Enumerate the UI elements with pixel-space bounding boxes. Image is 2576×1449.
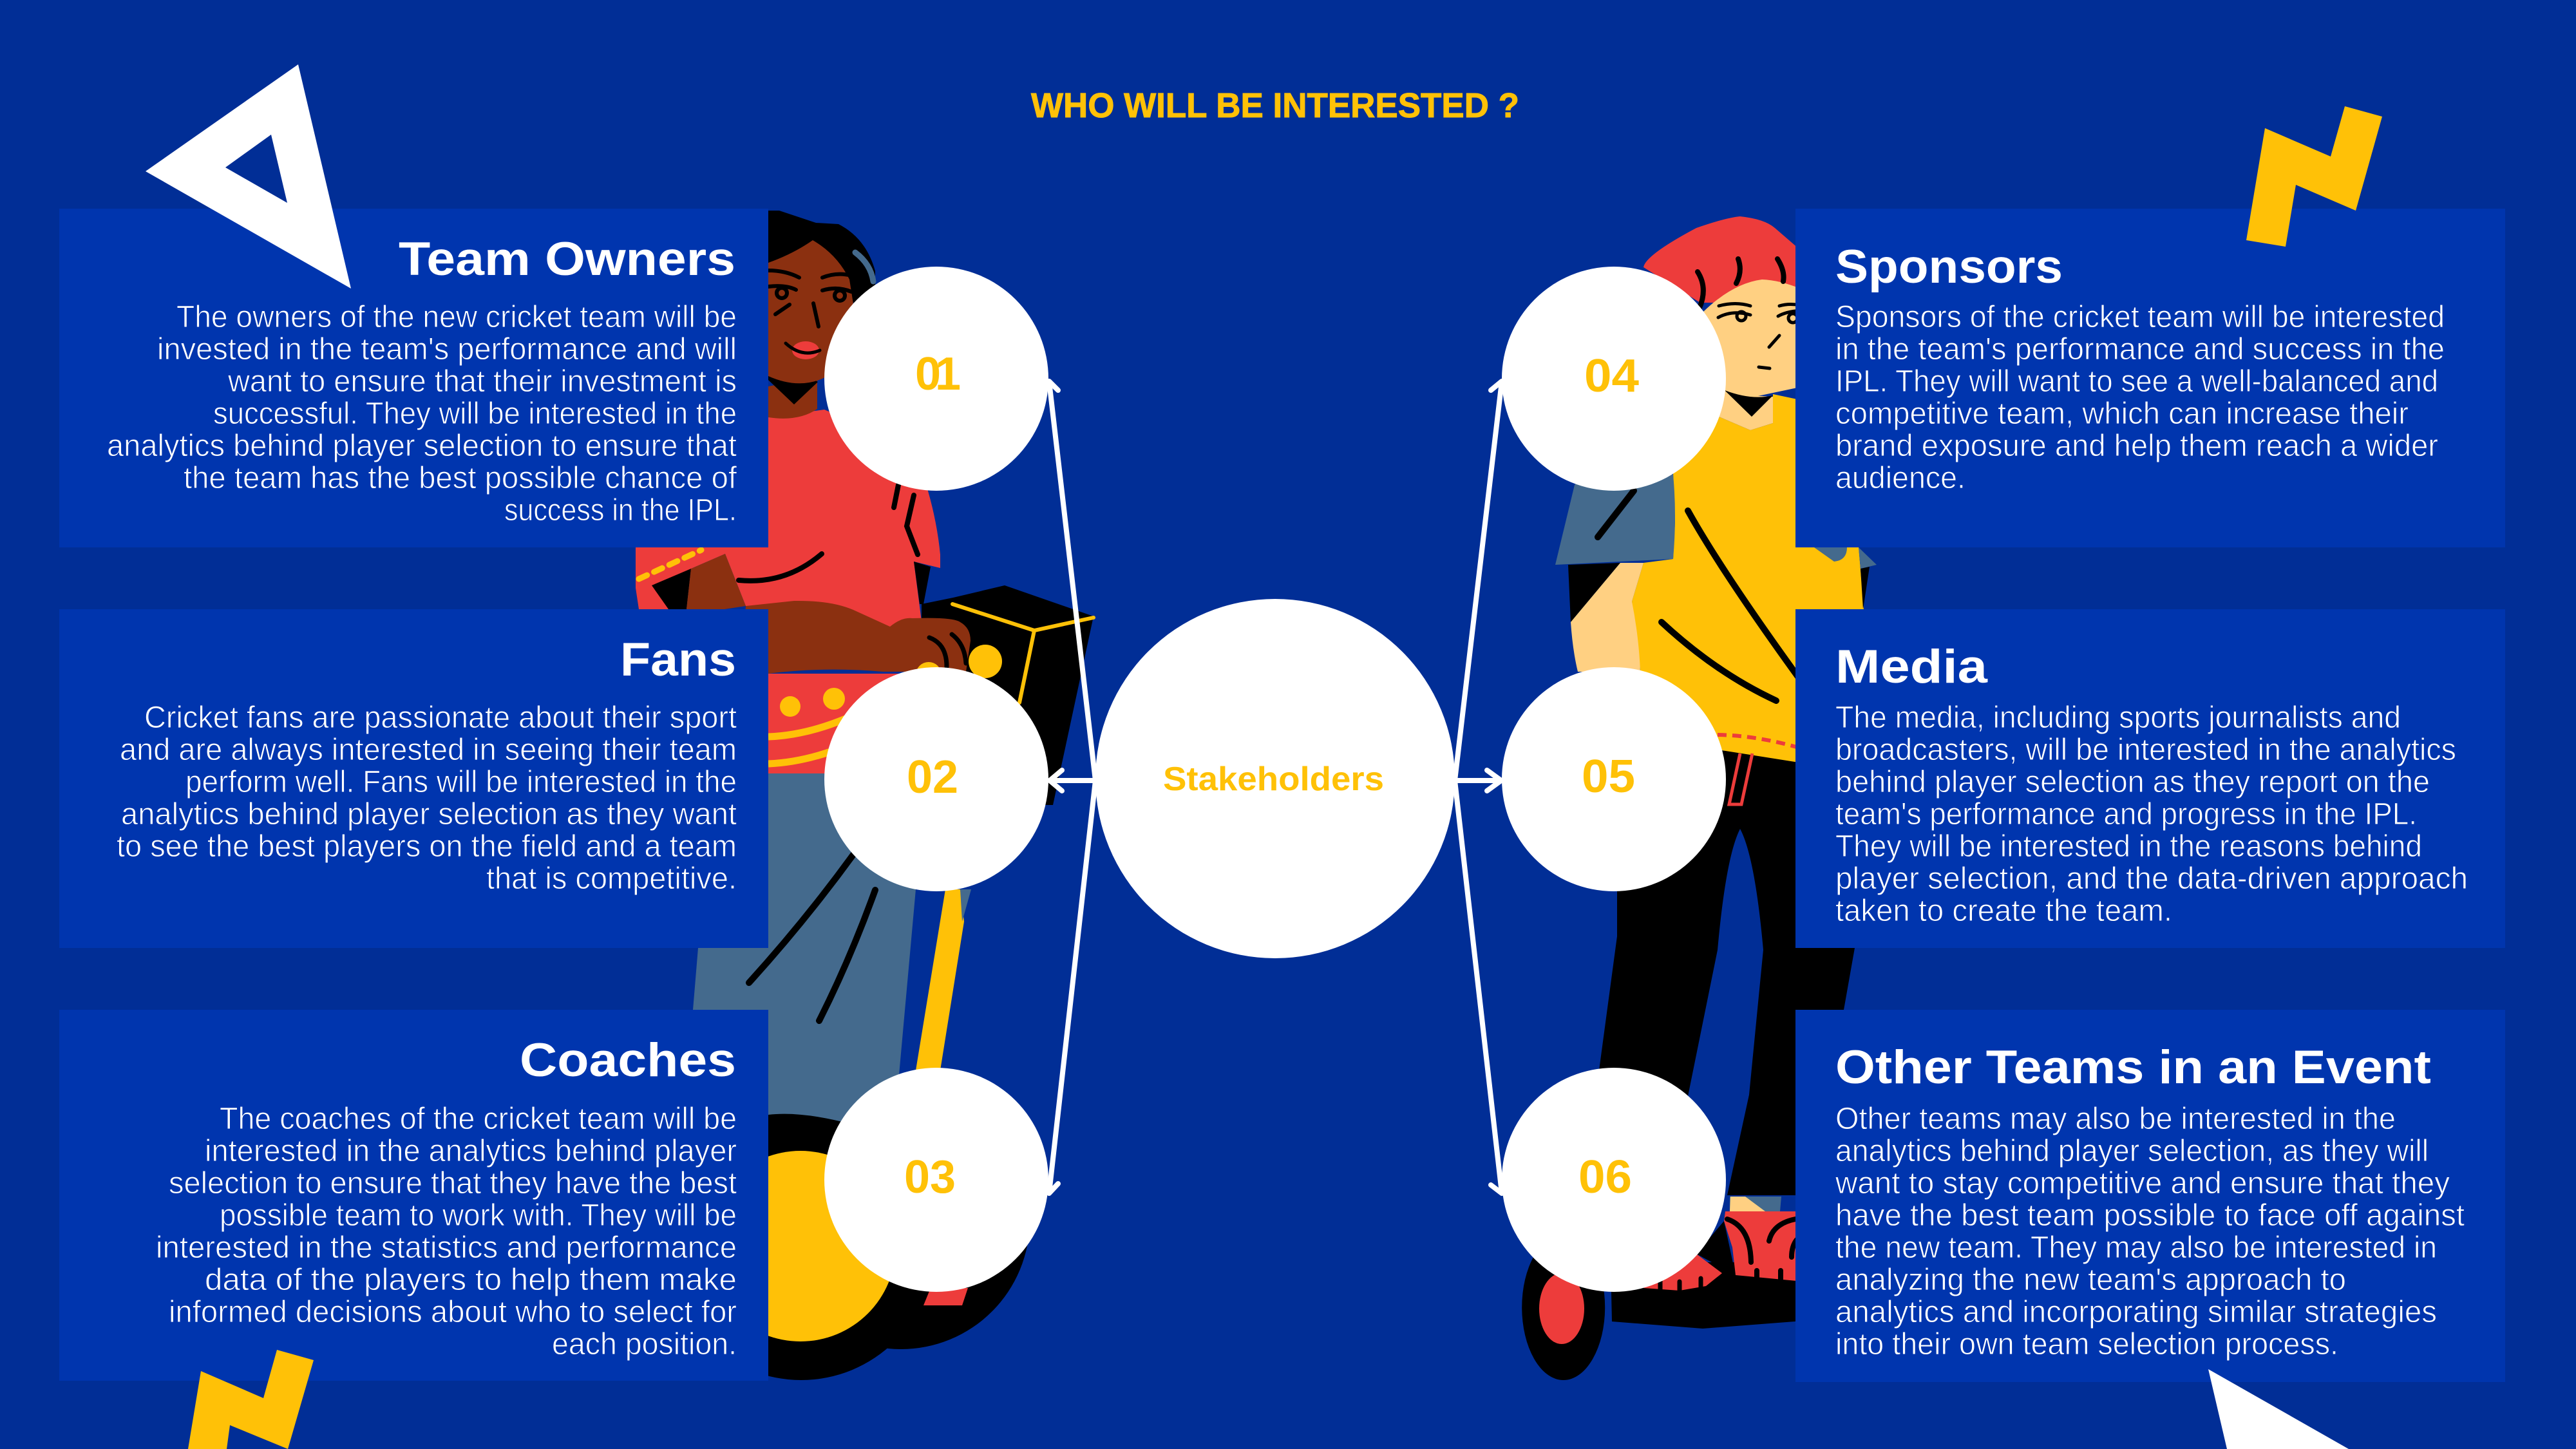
text block: team owners: invested in the team's performance and will — [157, 332, 737, 366]
text block: media: player selection, and the data-driven approach — [1835, 862, 2468, 896]
text block: media: taken to create the team. — [1835, 894, 2172, 928]
node: 05 — [1502, 667, 1726, 891]
text block: coaches: informed decisions about who to select for — [169, 1295, 737, 1329]
text block: media: The media, including sports journalists and — [1835, 701, 2401, 735]
text block: other teams: Other teams may also be interested in the — [1835, 1102, 2396, 1136]
text block: coaches: The coaches of the cricket team will be — [220, 1102, 737, 1136]
text block: sponsors: audience. — [1835, 461, 1965, 495]
text block: sponsors: in the team's performance and success in the — [1835, 332, 2445, 366]
node: 02: 02 — [907, 752, 958, 803]
text block: media: They will be interested in the reasons behind — [1835, 829, 2422, 864]
panel: fans — [59, 609, 768, 948]
node: stakeholders — [1095, 599, 1455, 958]
node: 06: 06 — [1578, 1151, 1632, 1203]
text block: fans: analytics behind player selection as they want — [121, 797, 737, 831]
heading: fans: Fans — [620, 634, 736, 686]
arrow: to 06 — [1455, 781, 1502, 1193]
illustration: woman on yellow scooter — [636, 211, 1094, 1380]
text block: media: broadcasters, will be interested in the analytics — [1835, 733, 2456, 767]
text block: coaches: interested in the statistics and performance — [156, 1231, 737, 1265]
panel: media — [1795, 609, 2505, 948]
node: 01: 0 — [915, 348, 941, 400]
node: 04 — [1502, 267, 1726, 491]
text block: other teams — [1835, 1102, 2465, 1361]
node: 01: 1 — [935, 348, 961, 400]
text block: team owners: want to ensure that their investment is — [227, 365, 737, 399]
arrow: to 05 — [1455, 770, 1501, 791]
text block: coaches: possible team to work with. They will be — [220, 1198, 737, 1233]
node: 06 — [1502, 1068, 1726, 1292]
text block: coaches — [156, 1102, 737, 1361]
text block: media — [1835, 701, 2468, 928]
text block: team owners: success in the IPL. — [504, 493, 737, 527]
text block: fans: Cricket fans are passionate about their sport — [144, 701, 737, 735]
title: WHO WILL BE INTERESTED ? — [1031, 86, 1519, 125]
heading: team owners: Team Owners — [399, 233, 735, 285]
arrow: to 04 — [1455, 381, 1502, 781]
text block: team owners — [107, 300, 737, 527]
text block: team owners: the team has the best possible chance of — [184, 461, 737, 495]
text block: sponsors: Sponsors of the cricket team will be interested — [1835, 300, 2445, 334]
text block: fans: perform well. Fans will be interested in the — [185, 765, 737, 799]
text block: team owners: The owners of the new cricket team will be — [176, 300, 737, 334]
text block: sponsors: IPL. They will want to see a well-balanced and — [1835, 365, 2438, 399]
node: 02 — [824, 667, 1048, 891]
node: 03 — [824, 1068, 1048, 1292]
text block: fans: to see the best players on the field and a team — [117, 829, 737, 864]
text block: sponsors: brand exposure and help them reach a wider — [1835, 429, 2438, 463]
text block: other teams: into their own team selection process. — [1835, 1327, 2338, 1361]
text block: coaches: interested in the analytics behind player — [205, 1134, 737, 1168]
arrow: to 03 — [1049, 781, 1095, 1193]
panel: team owners — [59, 209, 768, 547]
text block: team owners: successful. They will be interested in the — [213, 397, 737, 431]
illustration: person in yellow shirt on red scooter — [1522, 216, 1877, 1380]
text block: team owners: analytics behind player selection to ensure that — [107, 429, 737, 463]
panel: other teams — [1795, 1010, 2505, 1382]
node: 04: 04 — [1584, 350, 1639, 402]
icon: white triangle bottom right — [2208, 1369, 2349, 1449]
text block: fans: that is competitive. — [486, 862, 737, 896]
panel: sponsors — [1795, 209, 2505, 547]
node: 01 — [824, 267, 1048, 491]
icon: yellow bolt top right — [2246, 106, 2382, 247]
node: stakeholders: Stakeholders — [1163, 761, 1384, 798]
panel: coaches — [59, 1010, 768, 1381]
text block: other teams: analytics and incorporating similar strategies — [1835, 1295, 2437, 1329]
text block: coaches: each position. — [552, 1327, 737, 1361]
icon: white triangle top left — [146, 64, 351, 289]
text block: coaches: data of the players to help them make — [205, 1263, 737, 1297]
heading: other teams: Other Teams in an Event — [1835, 1041, 2431, 1094]
text block: media: behind player selection as they report on the — [1835, 765, 2430, 799]
arrow: to 01 — [1049, 381, 1095, 781]
arrow: to 02 — [1050, 770, 1095, 791]
text block: other teams: have the best team possible to face off against — [1835, 1198, 2465, 1233]
text block: fans: and are always interested in seeing their team — [120, 733, 737, 767]
text block: sponsors: competitive team, which can increase their — [1835, 397, 2409, 431]
text block: media: team's performance and progress in the IPL. — [1835, 797, 2417, 831]
node: 03: 03 — [904, 1151, 956, 1203]
node: 05: 05 — [1582, 751, 1635, 802]
heading: media: Media — [1835, 641, 1989, 693]
text block: other teams: analytics behind player selection, as they will — [1835, 1134, 2429, 1168]
text block: sponsors — [1835, 300, 2445, 495]
text block: coaches: selection to ensure that they have the best — [169, 1166, 737, 1200]
heading: sponsors: Sponsors — [1835, 241, 2063, 293]
icon: yellow bolt bottom left — [188, 1350, 314, 1449]
text block: other teams: the new team. They may also be interested in — [1835, 1231, 2437, 1265]
text block: fans — [117, 701, 737, 896]
text block: other teams: analyzing the new team's approach to — [1835, 1263, 2346, 1297]
text block: other teams: want to stay competitive and ensure that they — [1835, 1166, 2450, 1200]
heading: coaches: Coaches — [520, 1034, 736, 1086]
